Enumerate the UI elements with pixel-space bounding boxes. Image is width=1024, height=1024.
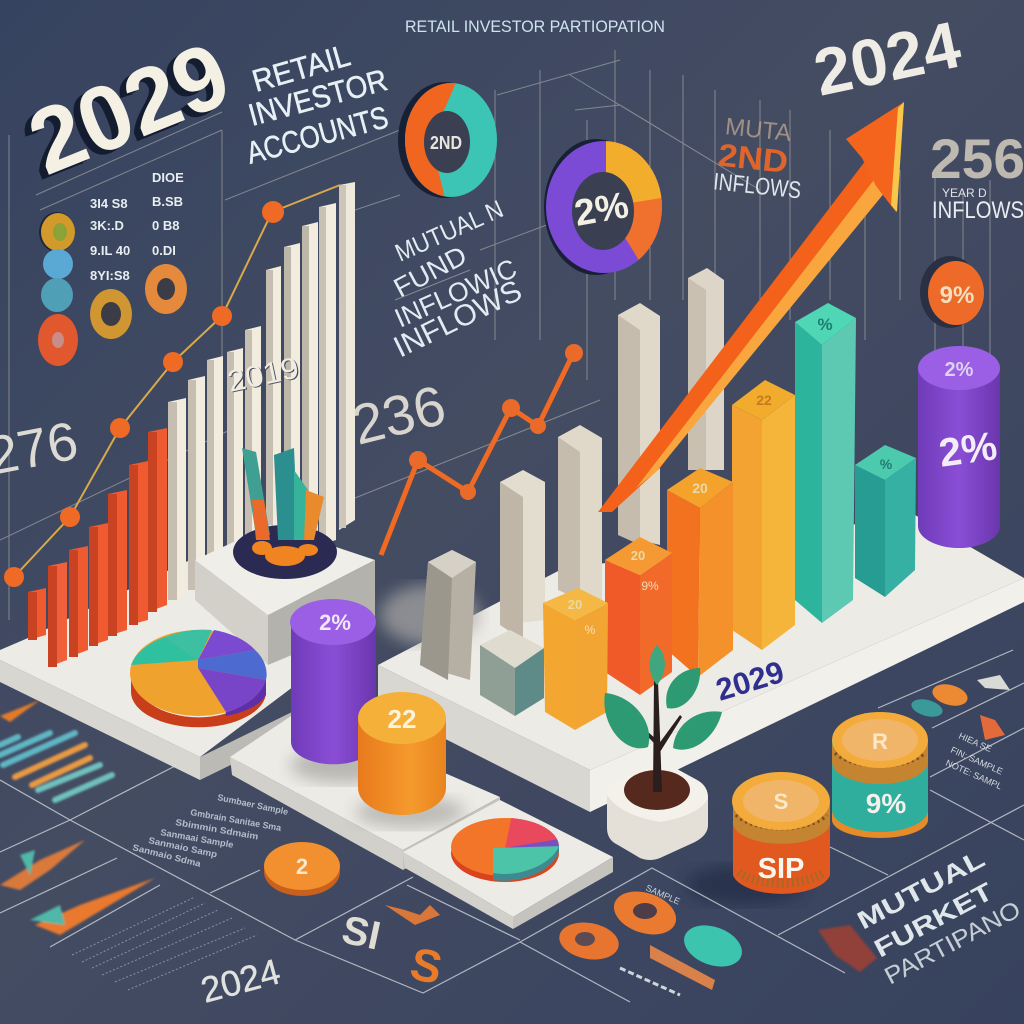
zigzag orange trend line — [381, 344, 583, 555]
SIP coin stack front: SIP — [758, 853, 804, 885]
small pie on lower platform — [451, 818, 559, 882]
floor label: SIS: SI — [338, 908, 384, 959]
floor label: SIS — [338, 908, 447, 994]
floor grid lines — [0, 650, 1024, 1002]
title: retail investor participation: RETAIL INVESTOR PARTIOPATION — [405, 17, 665, 36]
pedestal with plant — [195, 448, 375, 665]
trend line with dots — [4, 185, 340, 587]
year label: 2024 bottom: 2024 — [196, 950, 284, 1011]
bar: amber tall — [732, 380, 795, 650]
small teal-grey cube — [480, 630, 544, 716]
floor panel: small white text rows — [132, 792, 289, 869]
bar: orange two — [605, 537, 672, 695]
bar: teal tall — [795, 303, 856, 623]
legend labels: DIOE — [152, 170, 184, 185]
bar: amber one: 20 — [568, 597, 582, 612]
floor sketch: red scribble near mutual — [818, 925, 877, 972]
legend icons — [38, 212, 187, 366]
purple cylinder right: 2% — [945, 359, 974, 381]
stat: 2019 label: 2019 — [226, 352, 303, 400]
heading: mutual fund inflows left: INFLOWIC — [390, 253, 521, 333]
SIP coin stack back — [832, 712, 928, 838]
bar: amber tall: 22 — [756, 392, 772, 408]
legend labels — [90, 170, 184, 283]
SIP coin stack front — [732, 772, 830, 894]
floor panel: small white text rows: Sanmaio Sdma — [132, 842, 203, 869]
floor sketch: small orange marks near SIS — [385, 905, 440, 925]
orange cylinder — [358, 692, 446, 815]
legend labels: 9.IL 40 — [90, 243, 130, 258]
floor panel: right top icons: HIEA SE — [957, 731, 993, 754]
floor panel: right top icons — [909, 675, 1010, 791]
floating coin: 2 — [296, 854, 308, 879]
bar: orange three — [667, 468, 733, 677]
purple cylinder left: 2% — [319, 610, 351, 635]
legend labels: B.SB — [152, 194, 183, 209]
floor panel: dotted texture — [72, 897, 257, 990]
heading: mutual 2ND inflows centre — [712, 113, 808, 204]
lower platform two — [403, 800, 613, 929]
plant in pot — [604, 645, 722, 860]
purple cylinder right — [918, 346, 1000, 548]
floor panel: small white text rows: Sanmaai Sample — [160, 827, 234, 850]
stat: 256 years inflows: YEAR D — [942, 186, 987, 200]
heading: mutual furket participation: MUTUAL — [853, 845, 989, 935]
SIP coin stack back: 9% — [866, 788, 906, 819]
heading: 2029 large: 2029 — [12, 26, 240, 197]
donut: 2ND teal and orange — [398, 82, 497, 198]
donut: 2% purple and amber — [544, 139, 662, 275]
SIP coin stack front: S — [774, 789, 788, 814]
pie chart — [130, 630, 267, 727]
heading: mutual fund inflows left — [389, 195, 527, 364]
heading: mutual fund inflows left: FUND — [389, 240, 472, 303]
red bars — [28, 428, 167, 667]
heading: mutual 2ND inflows centre: 2ND — [716, 137, 790, 180]
big rising arrow — [598, 102, 904, 512]
legend labels: 3K:.D — [90, 218, 124, 233]
heading: 2029 large: 2029 — [15, 23, 243, 195]
heading: mutual fund inflows left: MUTUAL N — [391, 195, 507, 267]
floor panel: small white text rows: Sumbaer Sample — [217, 792, 289, 817]
floor panel: blue and orange mini bars — [0, 733, 112, 800]
bar: orange two: 20 — [631, 548, 645, 563]
bar: orange two: 9% — [641, 579, 659, 593]
floating coin — [264, 842, 340, 896]
right platform — [378, 515, 1024, 812]
left bar chart: red and white rising bars — [4, 182, 355, 667]
heading: mutual 2ND inflows centre: MUTA — [724, 113, 793, 147]
badge: 9%: 9% — [940, 282, 974, 309]
heading: retail investor accounts: RETAIL — [248, 38, 354, 99]
donut: 2ND teal and orange: 2ND — [430, 133, 462, 153]
bar: teal short: % — [880, 456, 893, 472]
heading: mutual furket participation — [853, 845, 1024, 990]
stat: 236: 236 — [346, 373, 452, 457]
stat: 256 years inflows — [930, 127, 1024, 224]
floor panel: small white text rows: Sbimmin Sdmaim — [175, 817, 259, 842]
background grid lines — [0, 50, 990, 620]
heading: 2029 large: 2029 — [9, 28, 237, 199]
heading: 2024 top right: 2024 — [808, 7, 967, 110]
legend labels: 0 B8 — [152, 218, 179, 233]
heading: mutual furket participation: PARTIPANO — [880, 896, 1024, 990]
badge: 9% — [920, 256, 984, 328]
stem — [636, 680, 682, 792]
heading: retail investor accounts — [243, 38, 392, 171]
orange cylinder: 22 — [388, 704, 416, 734]
bar: teal short — [855, 445, 916, 597]
heading: mutual 2ND inflows centre: INFLOWS — [712, 168, 802, 204]
plant sculpture — [233, 448, 337, 579]
floor panel: right top icons: FIN: SAMPLE — [949, 745, 1004, 777]
left platform — [0, 560, 375, 780]
floor label: SIS: S — [406, 937, 447, 994]
floor panel: small white text rows: Sanmaio Samp — [148, 835, 219, 860]
bar: teal tall: % — [817, 315, 833, 334]
floor panel: coloured pills bottom centre: SAMPLE — [644, 883, 682, 907]
bar: orange three: 20 — [692, 480, 708, 496]
legend labels: 8YI:S8 — [90, 268, 130, 283]
pot — [607, 764, 708, 860]
year label: 2029 on platform: 2029 — [712, 654, 788, 708]
floor panel: coloured pills bottom centre — [556, 883, 748, 995]
legend labels: 3I4 S8 — [90, 196, 128, 211]
heading: retail investor accounts: ACCOUNTS — [243, 99, 392, 171]
heading: mutual fund inflows left: INFLOWS — [389, 274, 527, 364]
floor panel: orange and teal sketches — [0, 700, 155, 935]
SIP coin stack back: R — [872, 729, 888, 754]
stat: 256 years inflows: 256 — [930, 127, 1024, 190]
stat: 2019 label: 2019 — [225, 352, 302, 399]
floor panel: small white text rows: Gmbrain Sanitae Sma — [190, 807, 283, 833]
white bars — [168, 182, 355, 600]
coloured 3D bars — [543, 303, 1000, 730]
purple cylinder left — [290, 599, 376, 764]
lower platform one — [230, 710, 500, 870]
bar: amber one: % — [585, 623, 596, 637]
bar: amber one — [543, 588, 608, 730]
floor panel: right top icons: NOTE: SAMPL — [944, 758, 1004, 791]
heading: mutual furket participation: FURKET — [870, 878, 998, 963]
legend panel: icons and small labels — [38, 170, 187, 366]
coin shadow — [685, 865, 805, 905]
heading: retail investor accounts: INVESTOR — [245, 62, 391, 133]
white bars on right platform — [420, 268, 724, 680]
purple cylinder right: 2% — [936, 424, 1000, 476]
donut: 2% purple and amber: 2% — [571, 184, 632, 234]
legend labels: 0.DI — [152, 243, 176, 258]
leaves — [604, 645, 722, 750]
